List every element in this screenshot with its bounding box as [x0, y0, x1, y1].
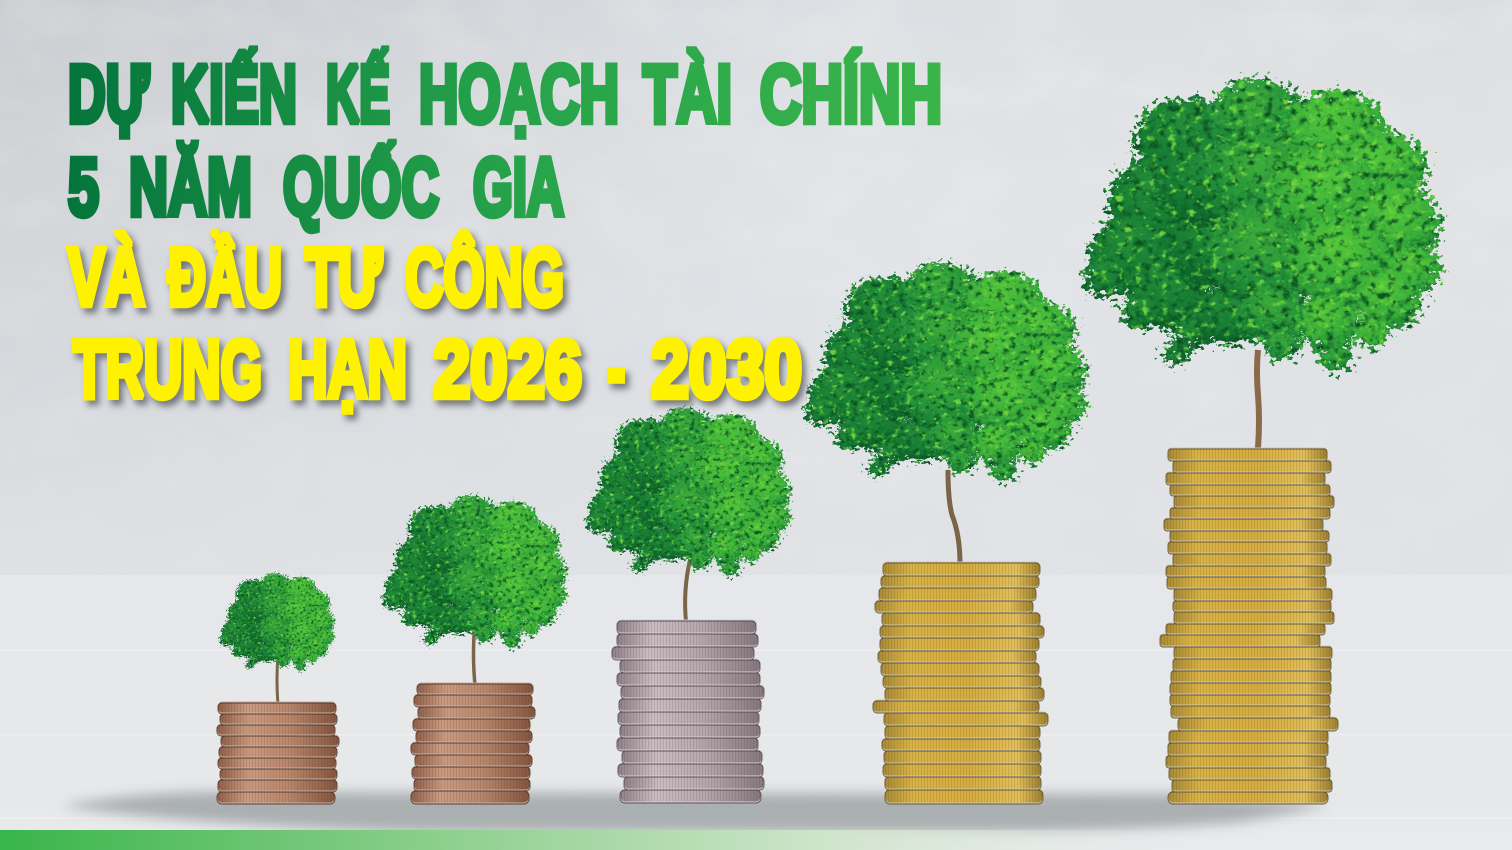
green gradient bar [0, 830, 1512, 850]
title line 3: TƯ [305, 232, 383, 323]
plant 3: tree on silver coins [586, 408, 791, 803]
crown 5 [1083, 78, 1442, 372]
title line 4: 2026 [433, 324, 582, 415]
coin stack 5 [1160, 448, 1338, 804]
title line 4 [73, 324, 802, 415]
trunk 4 [948, 470, 960, 564]
title line 1: DỰ [68, 49, 150, 140]
title line 1: CHÍNH [760, 49, 942, 140]
title line 2: NĂM [129, 142, 252, 233]
trunk 2 [474, 620, 475, 685]
title line 1: TÀI [643, 49, 732, 140]
title block [68, 49, 942, 415]
title line 1: HOẠCH [419, 49, 619, 140]
coin stack 1 [217, 702, 339, 804]
crown 2 [382, 496, 567, 648]
trunk 1 [277, 655, 278, 705]
title line 2 [68, 142, 564, 233]
title line 4: - [607, 324, 625, 415]
title line 4: TRUNG [73, 324, 262, 415]
title line 2: GIA [473, 142, 564, 233]
title line 3: ĐẦU [168, 232, 282, 323]
title line 1: KẾ [326, 49, 390, 140]
title line 3: VÀ [68, 232, 145, 323]
title line 4: 2030 [651, 324, 802, 415]
title line 2: 5 [68, 142, 99, 233]
coin stack 2 [411, 683, 535, 804]
plant 4: tall tree on gold coins [804, 262, 1087, 804]
trunk 5 [1257, 350, 1259, 448]
title line 3: CÔNG [405, 232, 564, 323]
title line 1 [68, 49, 942, 140]
crown 1 [220, 573, 335, 671]
crown 4 [804, 262, 1087, 482]
title line 2: QUỐC [283, 142, 439, 233]
plant 1: small tree on copper coins [217, 573, 339, 804]
coin stack 3 [612, 620, 764, 803]
coin stack 4 [873, 562, 1048, 804]
plant 5: largest tree on gold coins [1083, 78, 1442, 804]
plant 2: tree on copper coins [382, 496, 567, 804]
title line 1: KIẾN [171, 49, 297, 140]
trunk 3 [685, 560, 690, 622]
title line 3 [68, 232, 564, 323]
coin shadow on floor [60, 792, 1330, 832]
crown 3 [586, 408, 791, 576]
title line 4: HẠN [288, 324, 407, 415]
